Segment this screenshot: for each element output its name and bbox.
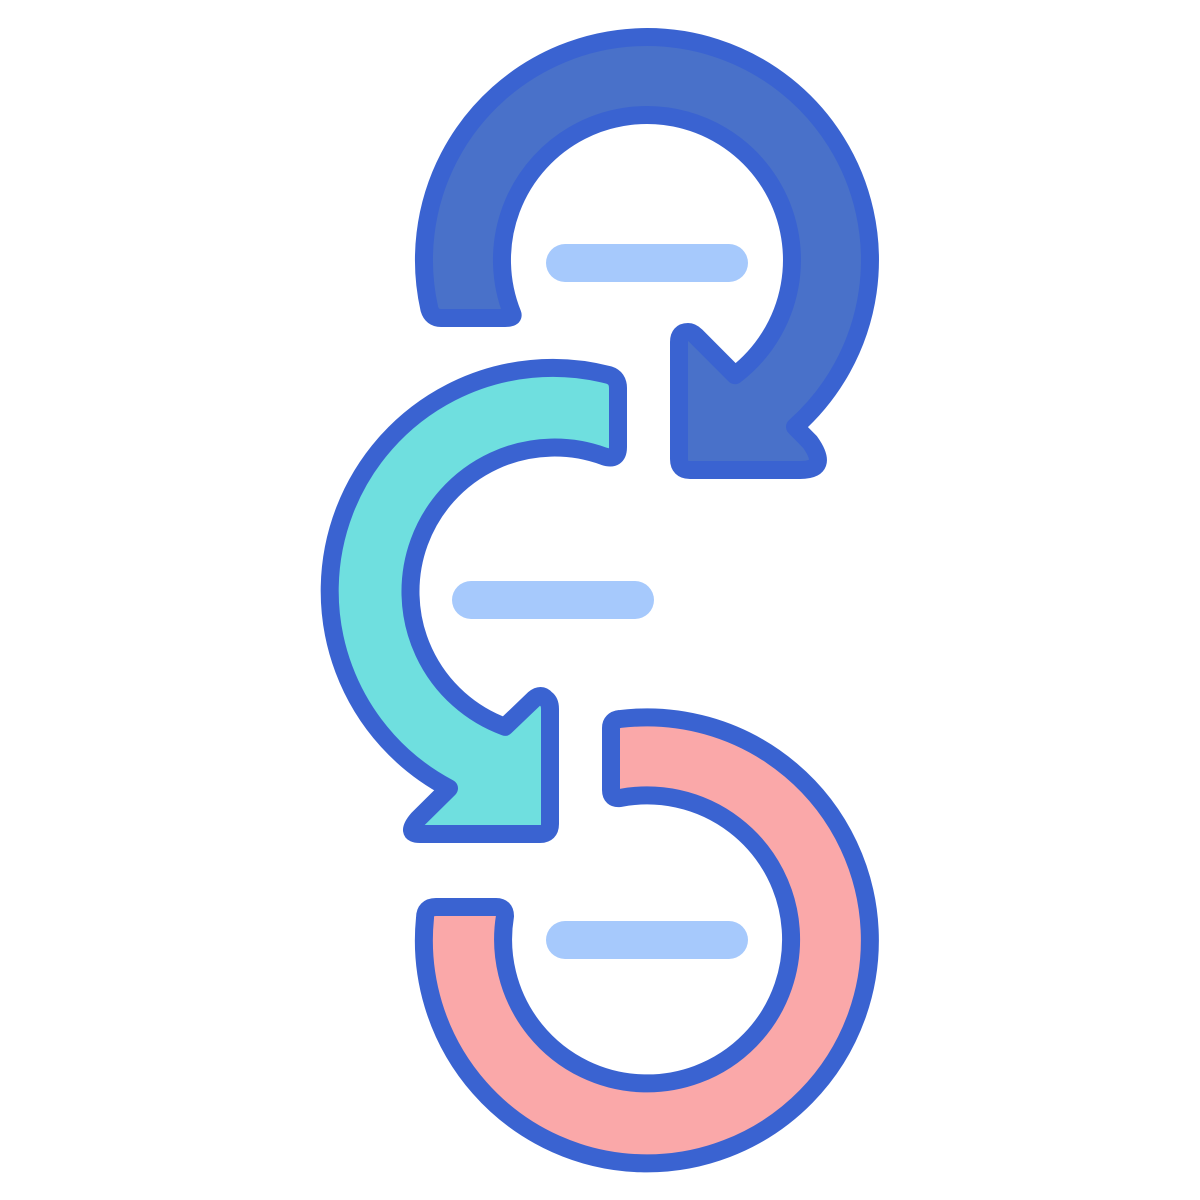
arrow: top dark blue circular arrow [424, 37, 870, 470]
bar: middle label placeholder [452, 581, 654, 619]
bar: top label placeholder [546, 244, 748, 282]
arrow: bottom pink circular segment [424, 717, 870, 1163]
bar: bottom label placeholder [546, 921, 748, 959]
arrow: middle teal circular arrow [330, 368, 618, 834]
